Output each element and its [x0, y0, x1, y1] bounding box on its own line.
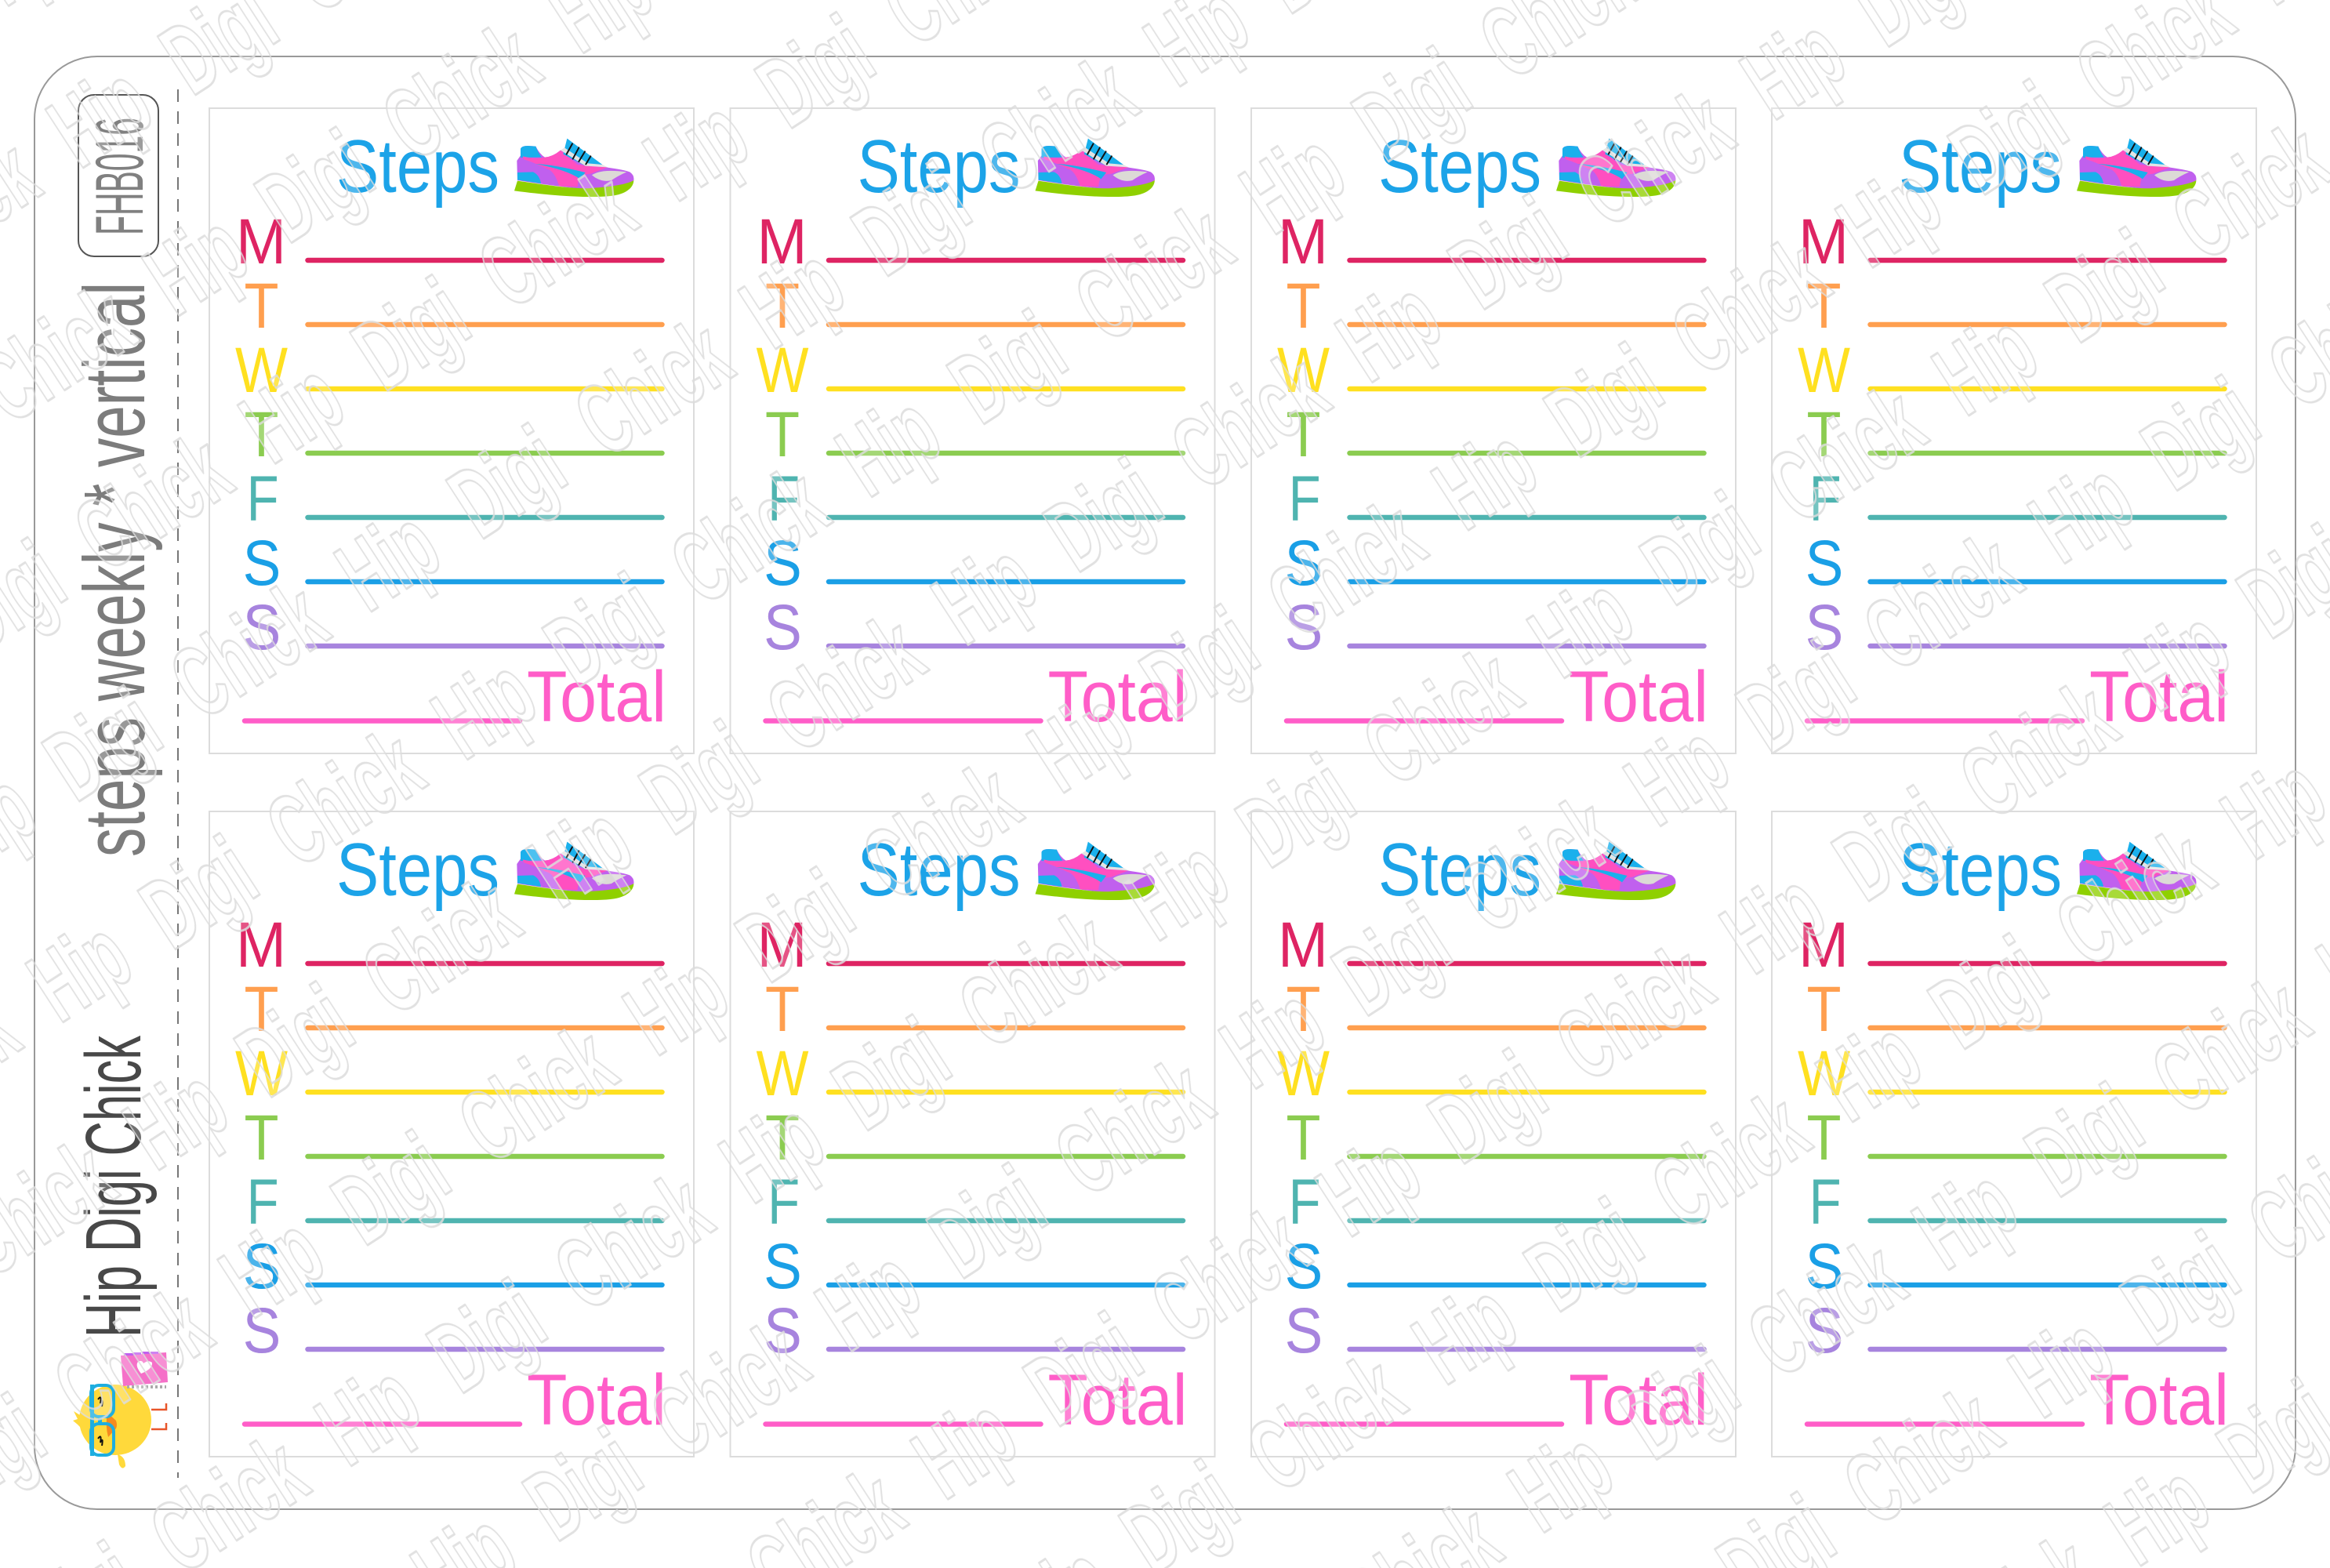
day rows: S: [1806, 592, 1843, 663]
day rows: T: [765, 974, 800, 1045]
day rows: M: [236, 206, 286, 278]
day rows: S: [1285, 528, 1323, 599]
day rows: W: [1798, 1038, 1851, 1109]
day rows: M: [1278, 206, 1328, 278]
day rows: F: [247, 1167, 279, 1238]
panel: steps tracker row 2 column 3: [1251, 811, 1736, 1457]
day rows: T: [1286, 270, 1320, 342]
day rows: S: [1806, 528, 1843, 599]
day rows: [1277, 206, 1704, 663]
heading: Steps: Steps: [336, 828, 499, 912]
day rows: W: [756, 1038, 809, 1109]
panel: steps tracker row 2 column 4: [1772, 811, 2256, 1457]
day rows: S: [764, 528, 802, 599]
heading: Steps: Steps: [1378, 125, 1541, 209]
panel: steps tracker row 2 column 2: [731, 811, 1215, 1457]
day rows: T: [245, 270, 279, 342]
day rows: S: [1285, 1231, 1323, 1302]
day rows: M: [757, 909, 808, 981]
day rows: F: [768, 463, 800, 535]
heading: Steps: Steps: [1899, 125, 2062, 209]
day rows: T: [765, 1102, 800, 1174]
product code badge: [78, 95, 158, 256]
panel: steps tracker row 1 column 1: [209, 108, 694, 753]
brand name: Hip Digi Chick: [70, 1035, 158, 1338]
day rows: T: [1806, 974, 1841, 1045]
panel: steps tracker row 1 column 3: [1251, 108, 1736, 753]
total row: Total: [527, 1360, 666, 1440]
day rows: W: [235, 1038, 289, 1109]
day rows: T: [765, 399, 800, 470]
day rows: T: [1806, 270, 1841, 342]
day rows: [1798, 909, 2225, 1367]
day rows: [756, 206, 1183, 663]
heading: Steps: Steps: [1378, 828, 1541, 912]
day rows: S: [764, 592, 802, 663]
day rows: S: [243, 1231, 281, 1302]
day rows: S: [243, 592, 281, 663]
total row: Total: [1569, 657, 1708, 737]
icon: running shoe: [514, 842, 633, 900]
icon: chick mascot with planner: [73, 1352, 168, 1468]
day rows: S: [764, 1295, 802, 1367]
day rows: F: [768, 1167, 800, 1238]
day rows: T: [1806, 1102, 1841, 1174]
day rows: T: [1806, 399, 1841, 470]
day rows: F: [1289, 463, 1321, 535]
day rows: T: [765, 270, 800, 342]
day rows: M: [236, 909, 286, 981]
day rows: [756, 909, 1183, 1367]
day rows: F: [1289, 1167, 1321, 1238]
day rows: [235, 206, 662, 663]
total row: Total: [1047, 657, 1187, 737]
total row: Total: [527, 657, 666, 737]
icon: running shoe: [2077, 139, 2196, 197]
day rows: M: [1278, 909, 1328, 981]
icon: running shoe: [1035, 842, 1155, 900]
day rows: T: [245, 974, 279, 1045]
heading: Steps: Steps: [858, 125, 1021, 209]
day rows: M: [1798, 909, 1849, 981]
day rows: W: [1277, 1038, 1330, 1109]
day rows: M: [757, 206, 808, 278]
day rows: S: [243, 528, 281, 599]
icon: running shoe: [1035, 139, 1155, 197]
day rows: W: [756, 335, 809, 406]
heading: Steps: Steps: [858, 828, 1021, 912]
day rows: W: [1277, 335, 1330, 406]
day rows: W: [1798, 335, 1851, 406]
day rows: S: [764, 1231, 802, 1302]
icon: running shoe: [1556, 842, 1675, 900]
day rows: S: [243, 1295, 281, 1367]
day rows: S: [1285, 1295, 1323, 1367]
panel: steps tracker row 2 column 1: [209, 811, 694, 1457]
panel: steps tracker row 1 column 2: [731, 108, 1215, 753]
icon: running shoe: [1556, 139, 1675, 197]
day rows: T: [245, 399, 279, 470]
day rows: [1277, 909, 1704, 1367]
panel: steps tracker row 1 column 4: [1772, 108, 2256, 753]
heading: Steps: Steps: [336, 125, 499, 209]
day rows: F: [1809, 1167, 1842, 1238]
total row: Total: [2089, 1360, 2229, 1440]
day rows: F: [247, 463, 279, 535]
icon: running shoe: [2077, 842, 2196, 900]
day rows: S: [1806, 1231, 1843, 1302]
day rows: T: [245, 1102, 279, 1174]
day rows: M: [1798, 206, 1849, 278]
day rows: S: [1285, 592, 1323, 663]
heading: Steps: Steps: [1899, 828, 2062, 912]
day rows: [1798, 206, 2225, 663]
day rows: T: [1286, 1102, 1320, 1174]
sidebar title: steps weekly * vertical: [67, 282, 163, 857]
day rows: S: [1806, 1295, 1843, 1367]
total row: Total: [1047, 1360, 1187, 1440]
day rows: [235, 909, 662, 1367]
total row: Total: [2089, 657, 2229, 737]
icon: running shoe: [514, 139, 633, 197]
total row: Total: [1569, 1360, 1708, 1440]
day rows: W: [235, 335, 289, 406]
day rows: F: [1809, 463, 1842, 535]
day rows: T: [1286, 399, 1320, 470]
day rows: T: [1286, 974, 1320, 1045]
